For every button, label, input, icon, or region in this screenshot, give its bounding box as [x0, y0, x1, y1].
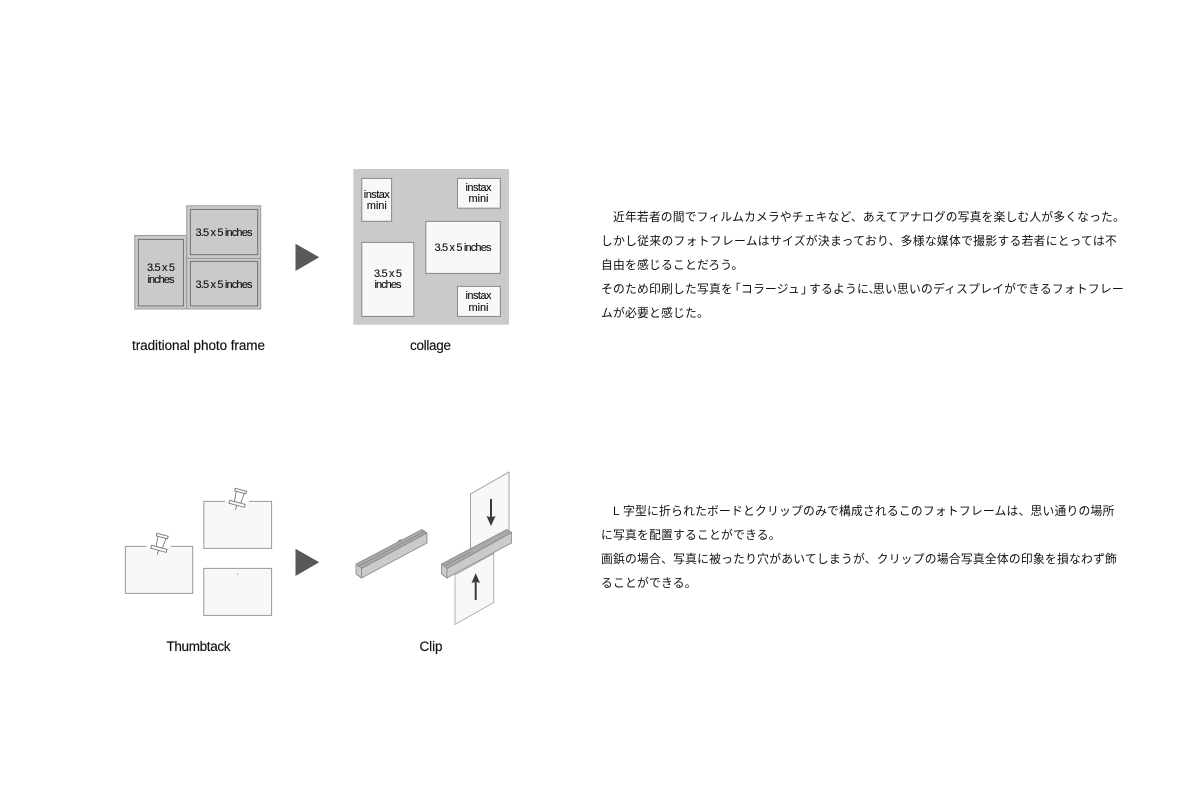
photo: instax mini top right: [458, 178, 500, 208]
photo: 3.5 x 5 landscape: [426, 221, 500, 273]
arrow: up: [472, 573, 480, 600]
photo: instax mini top left: [362, 178, 392, 221]
text block: background paragraph: 近年若者の間でフィルムカメラやチェキなど、あえてアナログの写真を楽しむ人が多くなった。: [613, 210, 1125, 224]
photo: lower sheet: [455, 554, 494, 624]
arrow: top: [296, 244, 319, 271]
photo: instax mini bottom right: mini: [468, 302, 488, 314]
photo: upper sheet: [470, 472, 509, 553]
text block: solution paragraph: [601, 504, 1117, 590]
photo: 3.5 x 5 landscape: 3.5 x 5 inches: [434, 242, 492, 254]
label: Clip: Clip: [420, 639, 442, 654]
text block: background paragraph: 思い思いのディスプレイができるフォトフレー: [873, 282, 1124, 296]
photo: instax mini bottom right: instax: [466, 290, 492, 302]
photo: instax mini top left: mini: [367, 200, 387, 212]
arrow: down: [486, 499, 496, 526]
frame: left portrait: inches: [148, 274, 175, 286]
icon: thumbtack left: [150, 533, 170, 557]
panel: thumbtack diagram: [125, 488, 272, 615]
text block: solution paragraph: ることができる。: [601, 576, 697, 590]
photo: pin hole bottom right: [204, 568, 272, 615]
photo: thumbtack left: [125, 546, 193, 593]
photo: instax mini top right: instax: [466, 182, 492, 194]
text block: background paragraph: 」: [801, 282, 813, 296]
panel: clip diagram: [356, 472, 512, 624]
photo: instax mini bottom right: [458, 286, 500, 316]
icon: thumbtack top right: [228, 488, 249, 512]
text block: background paragraph: [601, 210, 1125, 320]
text block: background paragraph: しかし従来のフォトフレームはサイズが決まっており、多様な媒体で撮影する若者にとっては不: [601, 234, 1117, 248]
text block: solution paragraph: 画鋲の場合、写真に被ったり穴があいてしまうが、クリップの場合写真全体の印象を損なわず飾: [601, 552, 1117, 566]
text block: background paragraph: そのため印刷した写真を: [601, 282, 733, 296]
frame: left portrait: 3.5 x 5: [147, 262, 175, 274]
photo: thumbtack top right: [204, 501, 272, 548]
photo: 3.5 x 5 portrait: inches: [374, 279, 402, 291]
label: traditional photo frame: traditional photo frame: [132, 338, 265, 353]
label: Thumbtack: Thumbtack: [166, 639, 231, 654]
text block: background paragraph: ムが必要と感じた。: [601, 306, 709, 320]
clip alone: [356, 530, 427, 578]
text block: solution paragraph: 字型に折られたボードとクリップのみで構成されるこのフォトフレームは、思い通りの場所: [623, 504, 1115, 518]
photo: instax mini top left: instax: [364, 189, 390, 201]
text block: background paragraph: 自由を感じることだろう。: [601, 258, 744, 272]
panel: traditional photo frame diagram: [135, 206, 261, 309]
collage background: [353, 169, 509, 325]
label: collage: collage: [410, 338, 451, 353]
text block: solution paragraph: に写真を配置することができる。: [601, 528, 781, 542]
frame: left portrait: [135, 236, 187, 309]
frame: bottom right landscape: 3.5 x 5 inches: [196, 279, 253, 291]
clip holding photos: [442, 530, 512, 578]
photo: 3.5 x 5 portrait: 3.5 x 5: [374, 268, 402, 280]
frame: top right landscape: 3.5 x 5 inches: [196, 227, 253, 239]
arrow: bottom: [296, 549, 319, 576]
panel: collage diagram: [353, 169, 509, 325]
photo: 3.5 x 5 portrait: [362, 242, 414, 316]
text block: background paragraph: 「コラージュ: [729, 282, 800, 296]
text block: solution paragraph: L: [613, 504, 620, 518]
photo: instax mini top right: mini: [468, 193, 488, 205]
text block: background paragraph: するように、: [809, 282, 881, 296]
